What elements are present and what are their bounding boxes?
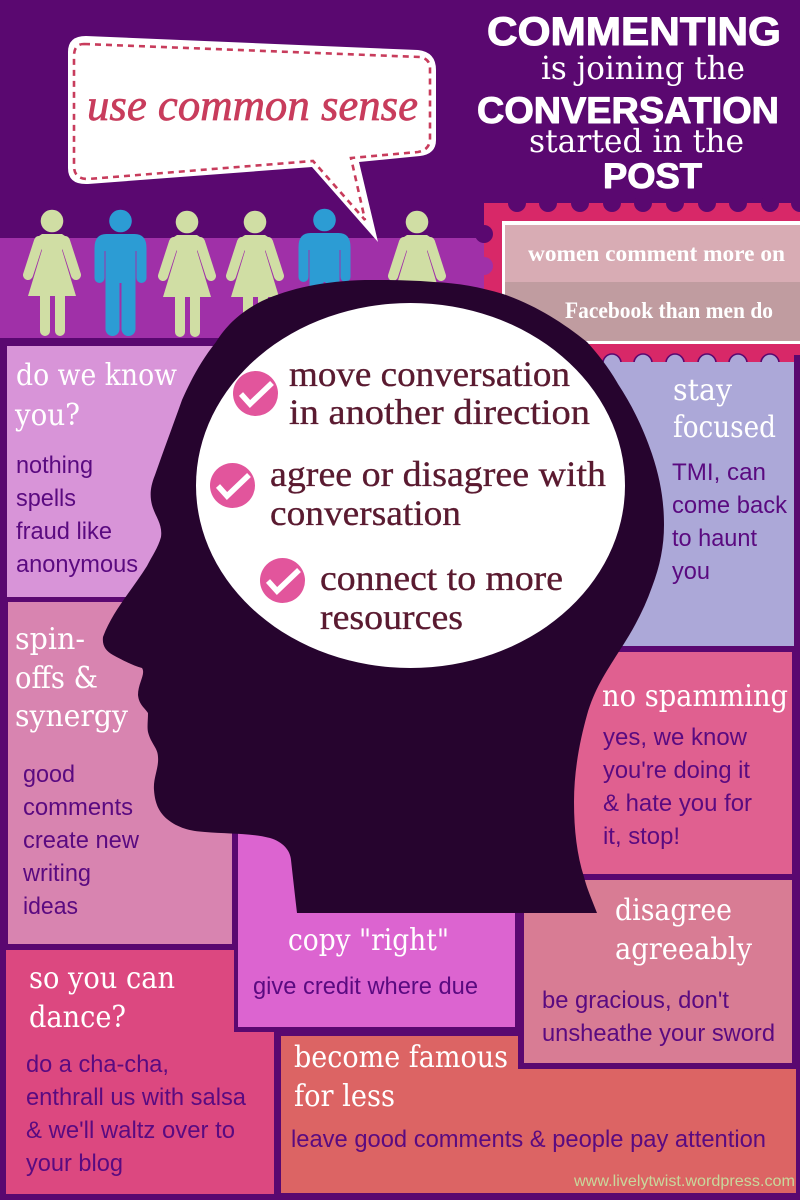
panel: spin-offs and synergy: good	[23, 761, 75, 788]
item: move conversation: move conversation	[289, 354, 570, 394]
panel: no spamming: & hate you for	[603, 790, 752, 817]
head silhouette	[103, 280, 664, 913]
speech bubble: use common sense	[87, 81, 418, 130]
panel: so you can dance: do a cha-cha,	[26, 1051, 169, 1078]
panel: stay focused: TMI, can	[672, 459, 766, 486]
panel: disagree agreeably: be gracious, don't	[542, 987, 729, 1014]
panel: do we know you: you?	[14, 398, 80, 433]
item: agree or disagree	[210, 454, 606, 533]
panel: no spamming: you're doing it	[603, 757, 750, 784]
panel: so you can dance: so you can	[29, 961, 175, 996]
panel: spin-offs and synergy: synergy	[15, 699, 128, 734]
panel: copy right: copy "right"	[288, 923, 449, 958]
item: move conversation: in another direction	[289, 392, 590, 432]
panel: become famous for less: for less	[294, 1079, 395, 1114]
panel: women comment stat stamp: Facebook than men do	[565, 298, 773, 323]
panel: copy right: give credit where due	[253, 973, 478, 1000]
panel: stay focused: come back	[672, 492, 788, 519]
title: is joining the	[541, 49, 745, 87]
title: POST	[603, 157, 702, 196]
panel: so you can dance	[6, 950, 274, 1194]
item: connect to resources	[260, 558, 563, 637]
panel: spin-offs and synergy: offs &	[15, 661, 98, 696]
panel: stay focused: you	[672, 558, 710, 585]
item: connect to resources: resources	[320, 597, 463, 637]
panel: do we know you	[7, 346, 307, 597]
panel: so you can dance: your blog	[26, 1150, 123, 1177]
item: move conversation	[233, 354, 590, 432]
panel: do we know you: fraud like	[16, 518, 112, 545]
panel: do we know you: spells	[16, 485, 76, 512]
panel: women comment stat stamp	[475, 194, 800, 362]
panel: spin-offs and synergy: spin-	[15, 622, 85, 657]
panel: disagree agreeably: unsheathe your sword	[542, 1020, 775, 1047]
thought bubble in head	[196, 303, 625, 668]
people row	[28, 209, 441, 337]
panel: do we know you: do we know	[16, 358, 177, 393]
panel: become famous for less: become famous	[294, 1040, 508, 1075]
panel: spin-offs and synergy	[8, 602, 232, 944]
panel: spin-offs and synergy: comments	[23, 794, 133, 821]
panel: stay focused: stay	[673, 373, 732, 408]
panel: disagree agreeably: agreeably	[615, 932, 752, 967]
item: agree or disagree: conversation	[270, 493, 461, 533]
panel: disagree agreeably	[524, 880, 792, 1063]
panel: do we know you: anonymous	[16, 551, 138, 578]
purple band behind people	[0, 238, 490, 338]
panel: disagree agreeably: disagree	[615, 893, 732, 928]
panel: no spamming	[540, 652, 792, 874]
panel: do we know you: nothing	[16, 452, 93, 479]
title: COMMENTING	[487, 10, 781, 54]
item: connect to resources: connect to more	[320, 558, 563, 598]
title: CONVERSATION	[477, 90, 779, 131]
panel: no spamming: yes, we know	[603, 724, 748, 751]
panel: no spamming: it, stop!	[603, 823, 680, 850]
item: agree or disagree: agree or disagree with	[270, 454, 606, 494]
panel: so you can dance: enthrall us with salsa	[26, 1084, 247, 1111]
panel: stay focused: to haunt	[672, 525, 757, 552]
title: started in the	[529, 122, 744, 160]
speech bubble	[68, 36, 436, 242]
panel: spin-offs and synergy: ideas	[23, 893, 78, 920]
title	[477, 10, 781, 196]
panel: so you can dance: dance?	[29, 1000, 126, 1035]
panel: copy right	[238, 805, 515, 1027]
panel: spin-offs and synergy: writing	[22, 860, 91, 887]
panel: become famous for less: leave good comments & people pay attention	[291, 1126, 766, 1153]
panel: spin-offs and synergy: create new	[23, 827, 140, 854]
website credit: www.livelytwist.wordpress.com	[573, 1173, 795, 1190]
panel: become famous for less	[281, 1036, 796, 1193]
panel: stay focused: focused	[673, 410, 776, 445]
panel: stay focused	[560, 354, 800, 652]
panel: so you can dance: & we'll waltz over to	[26, 1117, 235, 1144]
panel: women comment stat stamp: women comment more on	[528, 241, 785, 266]
